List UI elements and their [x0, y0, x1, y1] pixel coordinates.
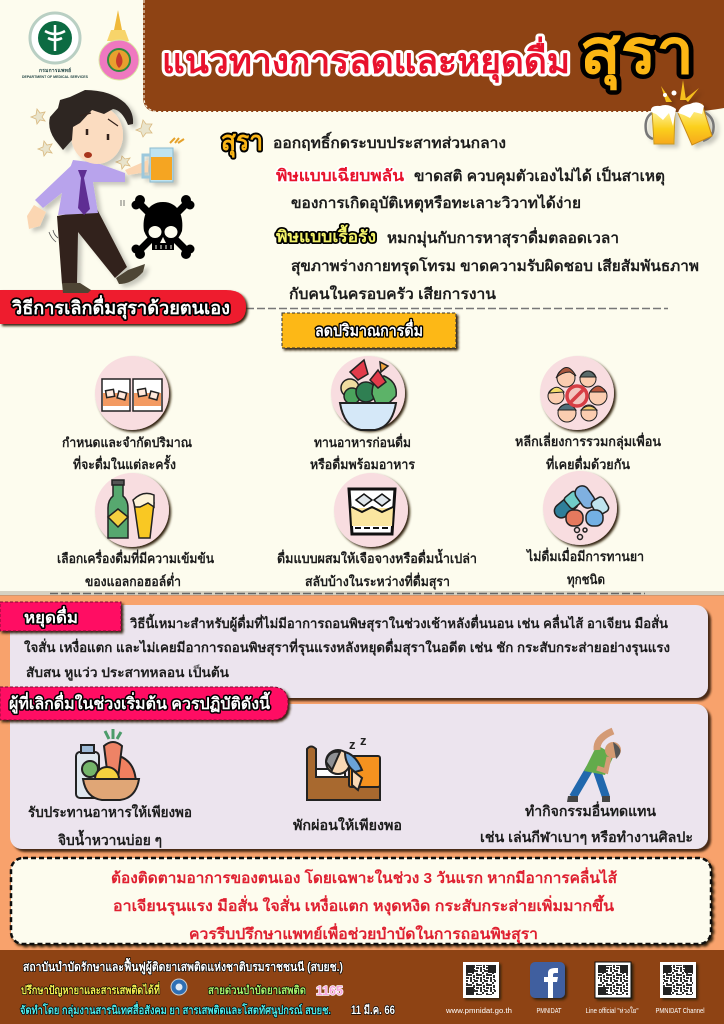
icon: two glasses [102, 379, 162, 411]
header banner [143, 0, 724, 112]
icon: sleeping person in bed [307, 746, 380, 800]
icon: skull and crossbones [132, 195, 194, 259]
icon: capsules [552, 483, 610, 540]
subheading box: reduce drinking [282, 313, 456, 348]
icon: clinking beer mugs [646, 80, 714, 145]
intro text block [221, 126, 699, 303]
man: shirt [58, 160, 125, 215]
heading word: alcohol: สุรา [221, 126, 263, 158]
icon: food basket [76, 729, 139, 800]
QR code: line official: Line official "ห่วงใย" [586, 1006, 639, 1015]
subheading box: reduce drinking: ลดปริมาณการดื่ม [315, 319, 423, 340]
panel: early quitting advice: z [360, 733, 367, 748]
intro text block: สุขภาพร่างกายทรุดโทรม ขาดความรับผิดชอบ เสียสัมพันธภาพ [291, 256, 699, 276]
callout: warning: อาเจียนรุนแรง มือสั่น ใจสั่น เหงื่อแตก หงุดหงิด กระสับกระส่ายเพิ่มมากขึ้น [113, 894, 615, 916]
tip 3: avoid drinking friends: ที่เคยดื่มด้วยกัน [546, 455, 630, 472]
panel: early quitting advice: เช่น เล่นกีฬาเบาๆ หรือทำงานศิลปะ [480, 829, 693, 845]
logo: department of medical services: กรมการแพทย์ [39, 67, 71, 74]
tip 6: no drinking with medication [525, 471, 644, 588]
tip 5: dilute or alternate with water: ดื่มแบบผสมให้เจือจางหรือดื่มน้ำเปล่า [277, 548, 477, 566]
intro text block: กับคนในครอบครัว เสียการงาน [289, 285, 497, 303]
icon: facebook: PMNIDAT [536, 1008, 562, 1015]
tip 3: avoid drinking friends [515, 356, 661, 472]
tip 5: dilute or alternate with water [277, 473, 477, 590]
footer: producer: จัดทำโดย กลุ่มงานสารนิเทศสื่อสังคม ยา สารเสพติดและโสตทัศนูปกรณ์ สบยช. [20, 1001, 331, 1018]
footer: consultation line: ปรึกษาปัญหายาและสารเสพติดได้ที่ [21, 981, 160, 997]
man: hair [49, 90, 133, 150]
panel: early quitting advice: ทำกิจกรรมอื่นทดแทน [525, 801, 656, 819]
QR code: website: www.pmnidat.go.th [445, 1008, 512, 1015]
tip 2: eat before drinking: หรือดื่มพร้อมอาหาร [310, 455, 415, 472]
man: rear shoe [116, 264, 145, 284]
tip 1: limit amount [62, 356, 192, 472]
tip 3: avoid drinking friends: หลีกเลี่ยงการรวมกลุ่มเพื่อน [515, 432, 661, 450]
QR code: website [445, 962, 512, 1015]
footer: hotline: สายด่วนบำบัดยาเสพติด [208, 983, 306, 997]
icon: hotline emblem [171, 979, 187, 995]
tip 1: limit amount: กำหนดและจำกัดปริมาณ [62, 435, 192, 450]
background: cream upper area [0, 0, 724, 596]
panel: stop drinking: วิธีนี้เหมาะสำหรับผู้ดื่มที่ไม่มีอาการถอนพิษสุราในช่วงเช้าหลังตื่นนอน เช่น คลื่นไส้ อาเจียน มือสั่น [129, 613, 668, 632]
intro text block: หมกมุ่นกับการหาสุราดื่มตลอดเวลา [387, 227, 619, 248]
logo: institute lotus [99, 10, 139, 80]
icon: salad bowl [340, 360, 396, 430]
man: right hand [125, 160, 148, 175]
tip 2: eat before drinking [310, 356, 415, 472]
footer: institute name: สถาบันบำบัดรักษาและฟื้นฟูผู้ติดยาเสพติดแห่งชาติบรมราชชนนี (สบยช.) [23, 957, 343, 975]
man: tie [78, 170, 90, 215]
intro text block: ออกฤทธิ์กดระบบประสาทส่วนกลาง [273, 131, 506, 152]
callout: warning: ควรรีบปรึกษาแพทย์เพื่อช่วยบำบัดในการถอนพิษสุรา [189, 923, 538, 944]
icon: bottle and beer glass [108, 480, 154, 538]
panel: early quitting advice: จิบน้ำหวานบ่อย ๆ [57, 829, 162, 848]
tip 2: eat before drinking: ทานอาหารก่อนดื่ม [314, 433, 411, 450]
tag: stop drinking [0, 602, 121, 631]
panel: early quitting advice: รับประทานอาหารให้เพียงพอ [28, 803, 192, 820]
man: face [87, 129, 108, 140]
panel: early quitting advice [10, 704, 708, 849]
tip 4: low alcohol drinks: ของแอลกอฮอล์ต่ำ [85, 572, 181, 589]
footer [0, 950, 724, 1024]
section banner: how to quit by yourself: วิธีการเลิกดื่มสุราด้วยตนเอง [11, 295, 230, 320]
tip 4: low alcohol drinks [57, 473, 214, 589]
icon: group with prohibition sign [548, 367, 607, 422]
man: legs [57, 209, 127, 284]
title: alcohol word: สุรา [580, 18, 694, 90]
footer: hotline number: 1165 [316, 983, 343, 998]
tip 6: no drinking with medication: ไม่ดื่มเมื่อมีการทานยา [525, 547, 644, 564]
logo: department of medical services: DEPARTMENT OF MEDICAL SERVICES [22, 75, 89, 79]
title: main: แนวทางการลดและหยุดดื่ม [162, 36, 570, 83]
icon: glass with ice [349, 489, 395, 534]
logo: department of medical services [22, 13, 89, 79]
QR code: channel [656, 962, 705, 1015]
QR code: line official [586, 962, 639, 1015]
icon: facebook [530, 962, 565, 1015]
panel: stop drinking: ใจสั่น เหงื่อแตก และไม่เคยมีอาการถอนพิษสุราที่รุนแรงหลังหยุดดื่มสุราในอดีต เช่น ชัก กระสับกระส่ายอย่างรุนแรง [24, 638, 670, 656]
panel: stop drinking [10, 605, 708, 698]
chronic poison label: พิษแบบเรื้อรัง [276, 224, 376, 246]
tip 6: no drinking with medication: ทุกชนิด [567, 572, 605, 588]
man: dizzy stars [31, 109, 152, 169]
tip 1: limit amount: ที่จะดื่มในแต่ละครั้ง [73, 454, 176, 472]
panel: early quitting advice: พักผ่อนให้เพียงพอ [293, 816, 402, 833]
man: front shoe [62, 283, 91, 293]
panel: early quitting advice: z [349, 737, 356, 752]
man: left arm and hand [35, 162, 75, 208]
tag: stop drinking: หยุดดื่ม [24, 606, 78, 628]
intro text block: ขาดสติ ควบคุมตัวเองไม่ได้ เป็นสาเหตุ [414, 166, 665, 186]
mug [150, 148, 173, 182]
illustration: drunk man with mug [27, 90, 184, 284]
icon: stretching person [567, 731, 621, 802]
tag: those quitting early should follow [0, 687, 288, 720]
tip 4: low alcohol drinks: เลือกเครื่องดื่มที่มีความเข้มข้น [57, 549, 214, 566]
QR code: channel: PMNIDAT Channel [656, 1008, 705, 1015]
intro text block: ของการเกิดอุบัติเหตุหรือทะเลาะวิวาทได้ง่าย [291, 193, 581, 213]
footer: date: 11 มี.ค. 66 [351, 1003, 395, 1017]
background: orange lower area [0, 595, 724, 951]
tip 5: dilute or alternate with water: สลับบ้างในระหว่างที่ดื่มสุรา [305, 572, 450, 590]
tag: those quitting early should follow: ผู้ที่เลิกดื่มในช่วงเริ่มต้น ควรปฏิบัติดังนี้ [9, 691, 270, 715]
man: head [71, 106, 123, 164]
panel: stop drinking: สับสน หูแว่ว ประสาทหลอน เป็นต้น [26, 663, 229, 681]
acute poison label: พิษแบบเฉียบพลัน [276, 166, 404, 185]
section banner: how to quit by yourself [0, 290, 246, 324]
callout: warning [11, 858, 711, 944]
man: motion marks [49, 200, 124, 242]
callout: warning: ต้องติดตามอาการของตนเอง โดยเฉพาะในช่วง 3 วันแรก หากมีอาการคลื่นไส้ [111, 867, 618, 887]
